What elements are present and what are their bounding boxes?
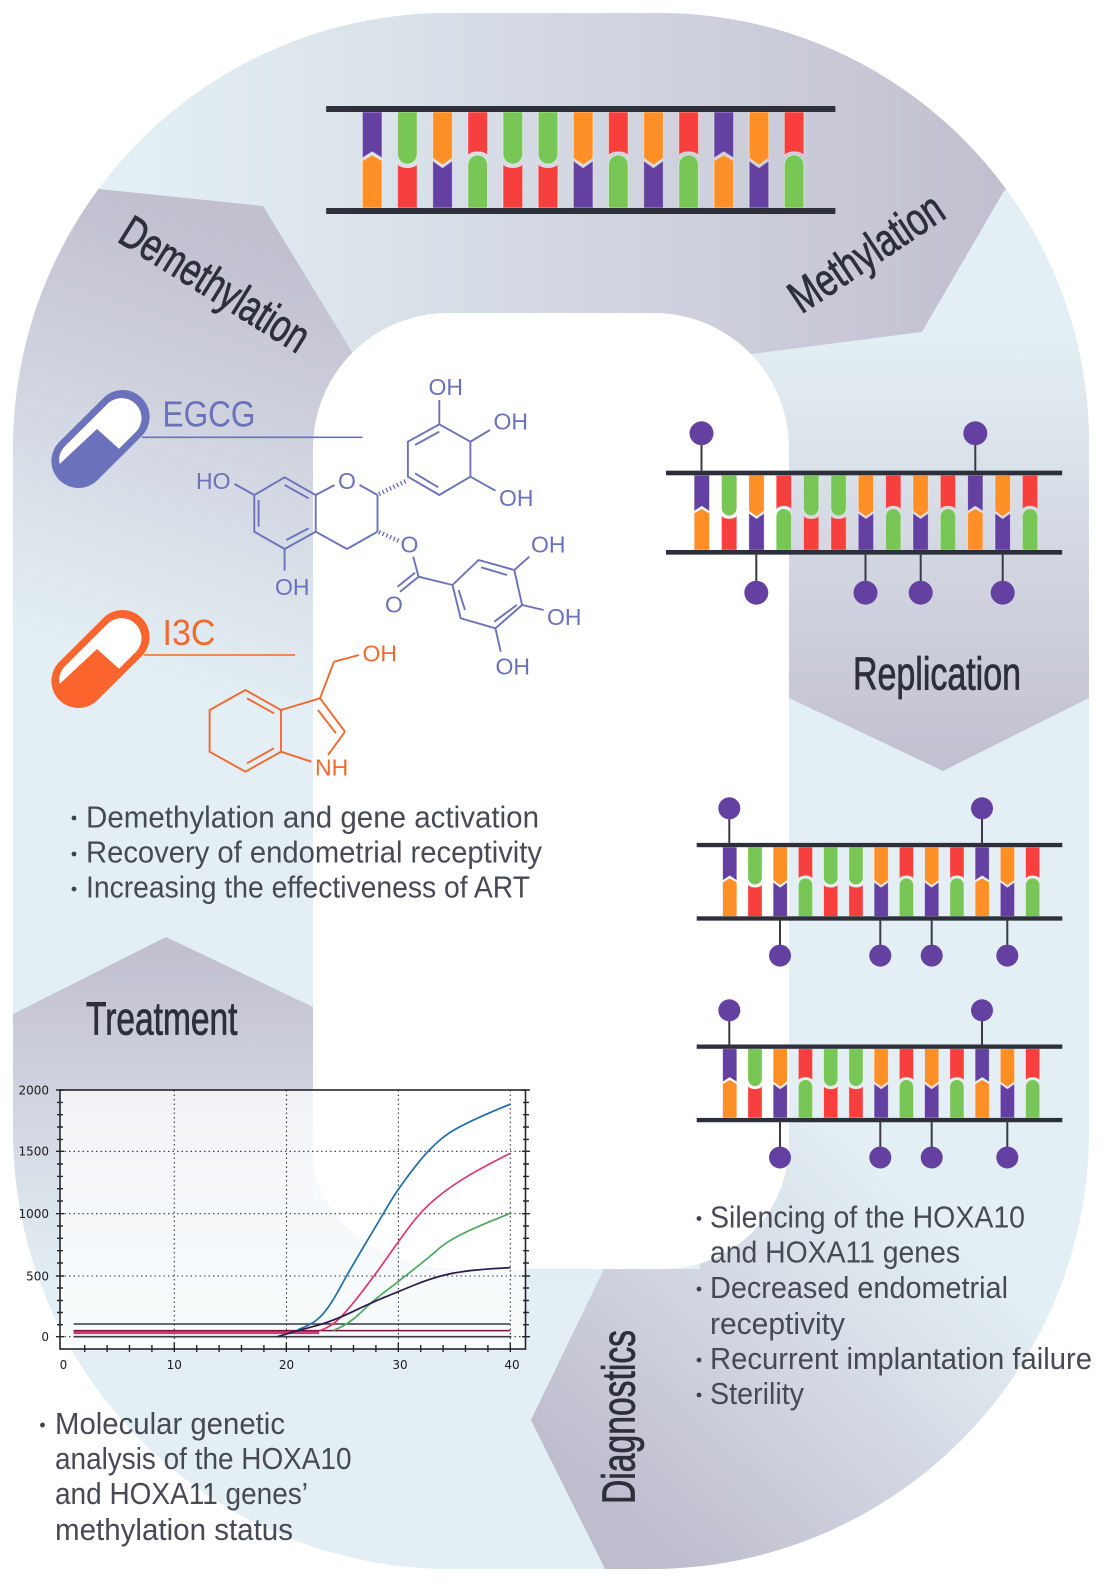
text block: molecular genetic analysis: analysis of the HOXA10 [55,1441,352,1476]
arrow band: methylation [222,13,1006,354]
EGCG molecule: OH [496,653,530,679]
line chart: amplification curves [18,1084,530,1372]
text block: diagnostics consequences: receptivity [710,1306,845,1341]
line chart: amplification curves: 20 [279,1358,294,1372]
DNA strand: methylated replication [666,421,1062,605]
text block: molecular genetic analysis: Molecular genetic [55,1406,285,1441]
line chart: amplification curves: 2000 [18,1084,49,1098]
line chart: amplification curves: 10 [167,1358,182,1372]
label: I3C: I3C [162,612,216,653]
heading: Demethylation: Demethylation [111,205,320,363]
text block: treatment benefits: Increasing the effectiveness of ART [86,870,530,905]
heading: Replication: Replication [853,648,1021,700]
EGCG molecule [196,374,582,679]
EGCG molecule: HO [196,468,230,494]
text block: diagnostics consequences [697,1200,1092,1411]
text block: treatment benefits: Demethylation and gene activation [86,799,539,834]
text block: diagnostics consequences: Sterility [710,1376,804,1411]
EGCG molecule: OH [494,408,528,434]
EGCG leader line [142,436,362,438]
label: EGCG: EGCG [162,394,256,435]
heading: Diagnostics: Diagnostics [592,1330,644,1504]
I3C molecule: OH [362,641,397,667]
arrow band: demethylation [13,189,352,650]
I3C leader line [144,654,295,656]
EGCG molecule: OH [275,574,310,600]
text block: diagnostics consequences: Decreased endometrial [710,1270,1008,1305]
text block: treatment benefits [72,799,542,905]
text block: diagnostics consequences: Recurrent implantation failure [710,1341,1092,1376]
text block: diagnostics consequences: and HOXA11 genes [710,1235,960,1270]
text block: molecular genetic analysis: methylation status [55,1512,293,1547]
line chart: amplification curves: 40 [504,1358,520,1372]
heading: Treatment: Treatment [86,992,238,1044]
DNA strand: top unmethylated [326,106,835,214]
EGCG molecule: OH [499,485,534,511]
EGCG molecule: O [338,468,356,494]
EGCG molecule: OH [547,604,582,630]
text block: treatment benefits: Recovery of endometrial receptivity [86,835,542,870]
line chart: amplification curves: 30 [392,1358,408,1372]
line chart: amplification curves: 1000 [18,1207,49,1221]
arrow band: replication [772,191,1089,771]
EGCG molecule: OH [428,374,463,400]
line chart: amplification curves: 0 [41,1330,49,1344]
line chart: amplification curves: 0 [60,1358,67,1372]
text block: molecular genetic analysis: and HOXA11 genes’ [55,1476,308,1511]
EGCG molecule: O [385,592,403,618]
icon: I3C pill [59,618,142,684]
EGCG molecule: OH [531,532,566,558]
DNA strand: daughter copy two [697,999,1062,1168]
text block: molecular genetic analysis [40,1406,351,1547]
I3C molecule: NH [315,755,348,781]
heading: Methylation: Methylation [778,182,953,323]
line chart: amplification curves: 1500 [18,1144,49,1158]
DNA strand: daughter copy one [697,797,1062,967]
arrow band: diagnostics [531,1167,1021,1569]
line chart: amplification curves: 500 [26,1270,49,1284]
arrow band: treatment [13,937,313,1260]
icon: EGCG pill [59,398,142,464]
EGCG molecule: O [400,532,418,558]
I3C molecule [210,641,397,781]
text block: diagnostics consequences: Silencing of the HOXA10 [710,1200,1025,1235]
